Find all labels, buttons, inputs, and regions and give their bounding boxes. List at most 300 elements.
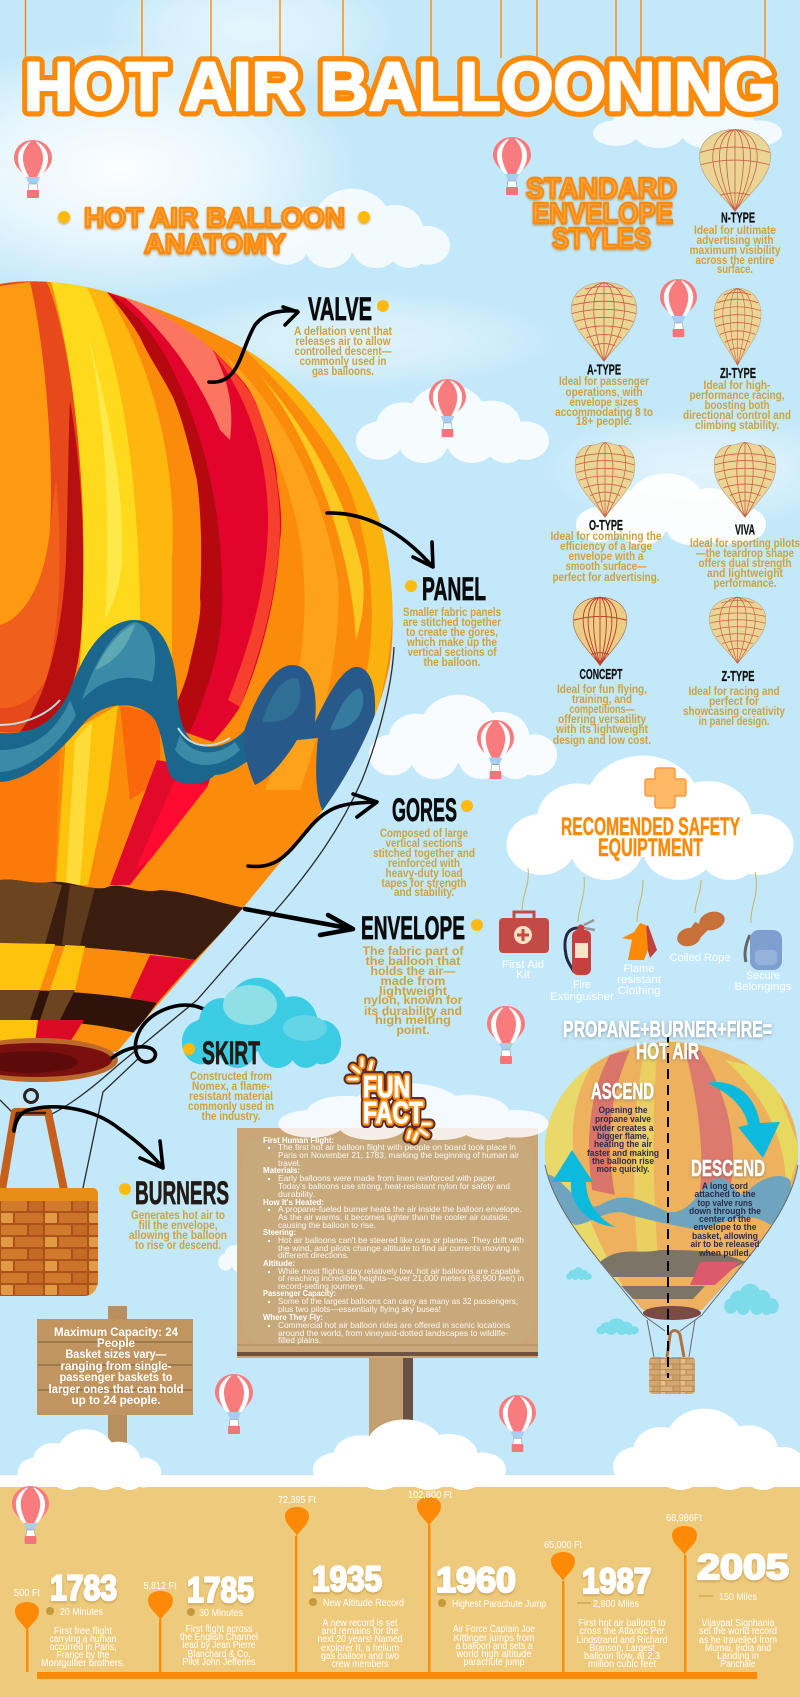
gores heading: GORES bbox=[392, 792, 457, 828]
O-type text: perfect for advertising. bbox=[552, 571, 660, 584]
fun fact text: How It's Heated: bbox=[263, 1197, 324, 1207]
timeline bar bbox=[37, 1672, 757, 1679]
dark lower bands bbox=[0, 880, 245, 960]
Concept balloon bbox=[573, 597, 627, 665]
N-type text: maximum visibility bbox=[690, 244, 781, 257]
milestone 1987 bbox=[576, 1562, 668, 1670]
pin 1987 bbox=[544, 1540, 582, 1672]
fun fact text: First Human Flight: bbox=[263, 1135, 334, 1145]
ascend text: more quickly. bbox=[596, 1164, 650, 1174]
balloon envelope bbox=[0, 270, 400, 1060]
A-type text bbox=[555, 375, 653, 428]
heading: anatomy: ANATOMY bbox=[144, 228, 286, 259]
gores text bbox=[373, 827, 475, 899]
equipment labels: Clothing bbox=[618, 985, 660, 997]
fun fact text: Steering: bbox=[263, 1227, 296, 1237]
milestone 1987: 2,900 Miles bbox=[593, 1599, 639, 1610]
A-type balloon bbox=[571, 282, 637, 361]
equipment labels: Flame bbox=[624, 963, 654, 975]
pin 1960: 102,800 Ft bbox=[408, 1490, 452, 1501]
icon: fire extinguisher bbox=[565, 920, 595, 975]
skirt dot bbox=[183, 1043, 195, 1055]
fun fact text: different directions. bbox=[278, 1250, 349, 1260]
style: N-type bbox=[690, 130, 781, 276]
Concept text: design and low cost. bbox=[553, 734, 651, 747]
fun fact text: Early balloons were made from linen reinforced with paper. bbox=[278, 1173, 497, 1183]
sign post bbox=[369, 1358, 413, 1440]
gores text: tapes for strength bbox=[382, 877, 466, 890]
burners text: Generates hot air to bbox=[131, 1209, 225, 1222]
milestone 1960: parachute jump bbox=[464, 1657, 525, 1668]
panel heading: PANEL bbox=[422, 571, 486, 607]
pin 1960 bbox=[408, 1490, 452, 1672]
equipment labels: Belongings bbox=[734, 981, 792, 993]
blue wave right bbox=[243, 665, 375, 812]
equipment labels: resistant bbox=[617, 974, 661, 986]
fun fact text: A propane-fueled burner heats the air inside the balloon envelope. bbox=[278, 1204, 522, 1214]
icon: first aid kit bbox=[499, 912, 549, 953]
Z-type text: Ideal for racing and bbox=[688, 685, 780, 698]
fun fact logo: FACT bbox=[363, 1095, 423, 1130]
valve text: commonly used in bbox=[300, 355, 386, 368]
equipment labels bbox=[502, 952, 792, 1003]
milestone 1935: next 20 years! Named bbox=[318, 1634, 403, 1645]
title: HOT AIR BALLOONING bbox=[24, 48, 776, 125]
fun fact logo: FACT bbox=[363, 1095, 423, 1130]
capacity sign bbox=[37, 1306, 193, 1447]
envelope text: The fabric part of bbox=[362, 945, 464, 958]
ascend text: heating the air bbox=[594, 1139, 652, 1149]
capacity text bbox=[48, 1327, 184, 1407]
milestone 2005 bbox=[697, 1548, 789, 1670]
equipment labels: Kit bbox=[516, 969, 530, 981]
capacity text: ranging from single- bbox=[60, 1361, 172, 1373]
descend text: down through the bbox=[689, 1206, 761, 1216]
milestone 1785: Pilot John Jefferies bbox=[182, 1657, 256, 1668]
burners text: allowing the balloon bbox=[129, 1229, 227, 1242]
panel text: vertical sections of bbox=[408, 646, 497, 659]
fun fact sign bbox=[237, 1059, 549, 1440]
fun fact logo: FACT bbox=[363, 1095, 423, 1130]
fun fact text: While most flights stay relatively low, hot air balloons are capable bbox=[278, 1266, 520, 1276]
milestone 1783 bbox=[41, 1569, 125, 1669]
fun fact text: around the world, from vineyard-dotted landscapes to wildlife- bbox=[278, 1328, 508, 1338]
capacity text: Basket sizes vary— bbox=[66, 1349, 167, 1361]
pale balloon illustration bbox=[540, 1040, 800, 1394]
fun fact text: Passenger Capacity: bbox=[263, 1288, 336, 1298]
milestone 1960 bbox=[436, 1561, 546, 1668]
fun fact text bbox=[263, 1135, 524, 1345]
fun fact text: Altitude: bbox=[263, 1258, 295, 1268]
fun fact text: record-setting journeys. bbox=[278, 1281, 365, 1291]
Concept text: training, and bbox=[572, 693, 632, 706]
title: HOT AIR BALLOONING bbox=[24, 48, 776, 125]
Concept name: CONCEPT bbox=[580, 667, 623, 683]
capacity text: up to 24 people. bbox=[72, 1395, 160, 1407]
heading: ascend: ASCEND bbox=[591, 1078, 654, 1104]
descend text: basket, allowing bbox=[692, 1231, 758, 1241]
safety cloud bbox=[506, 756, 794, 880]
fun fact text: Hot air balloons can't be steered like cars or planes. They drift with bbox=[278, 1235, 524, 1245]
N-type text: Ideal for ultimate bbox=[694, 224, 776, 237]
milestone 1785: Blanchard & Co, bbox=[188, 1649, 250, 1660]
milestone 2005: set the world record bbox=[699, 1626, 777, 1637]
basket bbox=[0, 1188, 98, 1296]
O-type text: smooth surface— bbox=[566, 560, 647, 573]
envelope text: point. bbox=[396, 1024, 430, 1037]
callout arrows bbox=[14, 307, 433, 1168]
valve heading: VALVE bbox=[308, 291, 372, 327]
gores text: reinforced with bbox=[388, 857, 460, 870]
ascend text: Opening the bbox=[598, 1105, 648, 1115]
Viva text: performance. bbox=[714, 577, 776, 590]
hanging strings bbox=[26, 0, 765, 58]
large balloon illustration bbox=[0, 270, 400, 1296]
A-type text: accommodating 8 to bbox=[555, 406, 653, 419]
panel dot bbox=[405, 580, 417, 592]
panel text: Smaller fabric panels bbox=[403, 606, 501, 619]
heading: standard envelope styles: STYLES bbox=[552, 223, 651, 255]
fun fact text: filled plains. bbox=[278, 1335, 321, 1345]
milestone 1783: 1783 bbox=[50, 1569, 117, 1608]
milestone 1783: occurred in Paris, bbox=[50, 1642, 116, 1653]
label: valve bbox=[294, 291, 392, 378]
Z-type text bbox=[683, 685, 785, 728]
valve text: releases air to allow bbox=[296, 335, 391, 348]
A-type text: envelope sizes bbox=[570, 396, 638, 409]
milestone 1785: the English Channel bbox=[180, 1632, 258, 1643]
envelope heading: ENVELOPE bbox=[361, 910, 465, 946]
envelope text: made from bbox=[380, 975, 446, 988]
lower fan stripes bbox=[0, 745, 60, 885]
dashed cord bbox=[667, 1037, 669, 1378]
milestone 1935: gas balloon and two bbox=[321, 1651, 399, 1662]
milestone 1785: First flight across bbox=[186, 1624, 252, 1635]
valve text bbox=[294, 325, 392, 378]
icon: backpack bbox=[745, 930, 782, 970]
milestone 1960: world high altitude bbox=[456, 1649, 532, 1660]
thin cable lines bbox=[0, 647, 394, 1188]
background clouds bbox=[218, 96, 782, 1272]
fun fact text: the wind, and pilots change altitude to find air currents moving in bbox=[278, 1243, 519, 1253]
milestone 1960: Air Force Captain Joe bbox=[453, 1624, 535, 1635]
ZI-type text: performance racing, bbox=[690, 389, 784, 402]
icon: gloves bbox=[622, 923, 657, 960]
panel: how it works balloon bbox=[540, 1016, 800, 1394]
N-type text: across the entire bbox=[696, 254, 775, 267]
small blue clouds bbox=[566, 1267, 779, 1335]
style: O-type bbox=[550, 442, 662, 584]
capacity text: larger ones that can hold bbox=[48, 1384, 184, 1396]
skirt text: resistant material bbox=[189, 1090, 273, 1103]
equipment labels: Extinguisher bbox=[550, 991, 614, 1003]
descend text: attached to the bbox=[694, 1189, 756, 1199]
sign board bbox=[37, 1319, 193, 1415]
O-type balloon bbox=[575, 442, 635, 517]
valve text: A deflation vent that bbox=[294, 325, 392, 338]
panel text: to create the gores, bbox=[406, 626, 498, 639]
milestone 1935: crew members bbox=[332, 1659, 388, 1670]
fun fact logo: FUN bbox=[363, 1069, 410, 1104]
panel text: which make up the bbox=[406, 636, 497, 649]
pin 1785: 5,812 Ft bbox=[144, 1581, 177, 1592]
milestone 2005: 150 Miles bbox=[719, 1592, 757, 1603]
skirt heading: SKIRT bbox=[202, 1035, 260, 1071]
pin 2005 bbox=[666, 1513, 702, 1672]
equipment labels: First Aid bbox=[502, 959, 544, 971]
ascend text: faster and making bbox=[587, 1148, 659, 1158]
milestone 2005: Panchale bbox=[720, 1659, 756, 1670]
descend text: air to be released bbox=[690, 1239, 760, 1249]
ring bbox=[24, 1090, 38, 1102]
O-type text: envelope with a bbox=[568, 550, 644, 563]
valve dot bbox=[377, 300, 389, 312]
N-type text: advertising with bbox=[696, 234, 774, 247]
ascend text: wider creates a bbox=[592, 1123, 654, 1133]
arrow: ascend bbox=[552, 1150, 615, 1227]
Viva text bbox=[690, 537, 800, 590]
milestone 1783: First free flight bbox=[54, 1626, 112, 1637]
ZI-type text: boosting both bbox=[704, 399, 770, 412]
ascend text: the balloon rise bbox=[592, 1156, 654, 1166]
milestone 1783: France by the bbox=[56, 1650, 110, 1661]
hanging cords bbox=[522, 868, 756, 923]
label: panel bbox=[403, 571, 501, 669]
equipment labels: Fire bbox=[573, 979, 591, 991]
ZI-type balloon bbox=[714, 288, 761, 365]
fun fact logo: FUN bbox=[363, 1069, 410, 1104]
pin 1783: 500 Ft bbox=[14, 1588, 40, 1599]
N-type text bbox=[690, 224, 781, 276]
equipment labels: Secure bbox=[746, 970, 780, 982]
fun fact text: of reaching incredible heights—over 21,000 meters (68,900 feet) in bbox=[278, 1273, 524, 1283]
pin 1935: 72,395 Ft bbox=[278, 1495, 316, 1506]
fun fact text: Today's balloons use strong, heat-resistant nylon for safety and bbox=[278, 1181, 510, 1191]
fun fact text: Some of the largest balloons can carry as many as 32 passengers, bbox=[278, 1296, 518, 1306]
descend text bbox=[689, 1181, 761, 1258]
pin 1935 bbox=[278, 1495, 316, 1672]
milestone 1987: First hot air balloon to bbox=[578, 1618, 666, 1629]
icon: coiled rope bbox=[675, 909, 727, 949]
ZI-type name: ZI-TYPE bbox=[720, 366, 756, 382]
label: gores bbox=[373, 792, 475, 899]
panel text: the balloon. bbox=[424, 656, 480, 669]
burners text bbox=[129, 1209, 227, 1252]
Concept text: with its lightweight bbox=[555, 723, 648, 736]
timeline balloon bbox=[12, 1486, 49, 1544]
envelope dot bbox=[471, 919, 483, 931]
burners text: to rise or descend. bbox=[135, 1239, 221, 1252]
milestone 1935: A new record is set bbox=[322, 1618, 398, 1629]
ascend text: propane valve bbox=[595, 1114, 651, 1124]
milestone 1987: 1987 bbox=[582, 1562, 651, 1601]
fun fact text: plus two pilots—essentially flying sky buses! bbox=[278, 1304, 441, 1314]
burners text: fill the envelope, bbox=[138, 1219, 218, 1232]
basket handle bbox=[2, 1112, 64, 1190]
milestone 1987: cross the Atlantic Per bbox=[580, 1626, 665, 1637]
milestone 1960: a balloon and sets a bbox=[456, 1641, 533, 1652]
white band and clouds bbox=[0, 1409, 800, 1490]
heading: anatomy: HOT AIR BALLOON bbox=[84, 202, 345, 233]
fun fact text: As the air warms, it becomes lighter than the cooler air outside, bbox=[278, 1212, 510, 1222]
milestone 1935: 1935 bbox=[312, 1560, 382, 1599]
milestone 1935: New Altitude Record bbox=[323, 1598, 404, 1609]
safety heading bbox=[561, 813, 740, 862]
envelope text: its durability and bbox=[364, 1005, 462, 1018]
milestone 2005: Vijaypat Signhania bbox=[702, 1618, 775, 1629]
label: envelope bbox=[361, 910, 483, 1037]
milestone 1987: Branson. Largest bbox=[590, 1643, 655, 1654]
fun fact logo bbox=[349, 1059, 430, 1140]
style: ZI-type bbox=[683, 288, 791, 432]
milestone 1785: 30 Minutes bbox=[199, 1608, 243, 1619]
burners dot bbox=[119, 1183, 131, 1195]
O-type name: O-TYPE bbox=[589, 518, 623, 534]
O-type text: efficiency of a large bbox=[560, 540, 652, 553]
capacity text: People bbox=[97, 1338, 135, 1350]
ZI-type text: Ideal for high- bbox=[704, 379, 771, 392]
gores dot bbox=[461, 800, 473, 812]
panel: safety equipment bbox=[499, 756, 794, 1003]
Z-type balloon bbox=[709, 597, 766, 663]
milestone 1987: million cubic feet bbox=[588, 1659, 656, 1670]
envelope text: the balloon that bbox=[366, 955, 461, 968]
milestone 1783: Montgolfier brothers. bbox=[41, 1658, 125, 1669]
envelope text bbox=[362, 945, 464, 1037]
ascend text: bigger flame, bbox=[597, 1131, 649, 1141]
pin 1785 bbox=[144, 1581, 177, 1672]
fun fact text: durability. bbox=[278, 1189, 315, 1199]
O-type text: Ideal for combining the bbox=[550, 530, 662, 543]
A-type text: operations, with bbox=[566, 386, 642, 399]
decorative mini balloons bbox=[14, 137, 697, 1452]
fun fact text: Materials: bbox=[263, 1165, 300, 1175]
descend text: envelope to the bbox=[694, 1222, 756, 1232]
descend text: when pulled. bbox=[698, 1248, 751, 1258]
safety heading: EQUIPTMENT bbox=[598, 834, 703, 862]
A-type text: Ideal for passenger bbox=[559, 375, 649, 388]
fun fact text: causing the balloon to rise. bbox=[278, 1220, 376, 1230]
milestone 1783: 20 Minutes bbox=[60, 1607, 103, 1618]
Concept text: competitions— bbox=[570, 703, 635, 716]
heading: propane formula: HOT AIR bbox=[636, 1038, 699, 1064]
fun fact text: Paris on November 21, 1783, marking the beginning of human air bbox=[278, 1150, 519, 1160]
sign post bbox=[108, 1306, 127, 1447]
gores text: vertical sections bbox=[386, 837, 462, 850]
heading: standard envelope styles: STANDARD bbox=[526, 173, 677, 205]
style: Z-type bbox=[683, 597, 785, 728]
milestone 1785: lead by Jean Pierre bbox=[182, 1640, 256, 1651]
N-type text: surface. bbox=[717, 263, 753, 276]
descend text: top valve runs bbox=[698, 1198, 752, 1208]
panel: timeline bbox=[0, 1409, 800, 1697]
envelope text: lightweight bbox=[379, 985, 447, 998]
milestone 1960: Kittinger jumps from bbox=[454, 1633, 534, 1644]
Viva balloon bbox=[714, 442, 776, 517]
descend text: A long cord bbox=[702, 1181, 748, 1191]
N-type name: N-TYPE bbox=[721, 210, 755, 226]
envelope text: nylon, known for bbox=[364, 994, 463, 1007]
envelope text: holds the air— bbox=[370, 965, 456, 978]
A-type text: 18+ people. bbox=[576, 415, 632, 428]
cloud over sign bbox=[278, 1083, 549, 1140]
gores text: stitched together and bbox=[373, 847, 475, 860]
capacity text: Maximum Capacity: 24 bbox=[54, 1327, 179, 1339]
valve text: controlled descent— bbox=[294, 345, 392, 358]
arrow: descend bbox=[707, 1082, 780, 1158]
ZI-type text bbox=[683, 379, 791, 432]
milestone 1935: explorer II, a helium bbox=[321, 1643, 399, 1654]
gores text: and stability. bbox=[394, 886, 454, 899]
Z-type name: Z-TYPE bbox=[722, 669, 755, 685]
pin 1987: 65,000 Ft bbox=[544, 1540, 582, 1551]
skirt text: Constructed from bbox=[190, 1070, 272, 1083]
pin 1783 bbox=[14, 1588, 40, 1672]
milestone 1960: 1960 bbox=[436, 1561, 516, 1600]
fun fact text: Commercial hot air balloon rides are offered in scenic locations bbox=[278, 1320, 510, 1330]
Concept text: Ideal for fun flying, bbox=[557, 683, 647, 696]
heading: standard envelope styles: ENVELOPE bbox=[532, 198, 673, 230]
equipment labels: Coiled Rope bbox=[670, 952, 730, 964]
milestone 1987: Lindstrand and Richard bbox=[576, 1635, 668, 1646]
fun fact text: Where They Fly: bbox=[263, 1312, 323, 1322]
milestone 1783: carrying a human bbox=[50, 1634, 117, 1645]
style: Viva bbox=[690, 442, 800, 590]
milestone 2005: as he travelled from bbox=[699, 1635, 777, 1646]
descend text: center of the bbox=[699, 1214, 751, 1224]
milestone 1960: Highest Parachute Jump bbox=[452, 1599, 546, 1610]
blue cloud bbox=[182, 978, 341, 1068]
milestone 1785 bbox=[180, 1571, 258, 1668]
label: burners bbox=[119, 1175, 229, 1252]
Viva name: VIVA bbox=[735, 522, 755, 538]
Concept text bbox=[553, 683, 651, 747]
skirt text bbox=[188, 1070, 274, 1123]
fun fact text: travel. bbox=[278, 1158, 301, 1168]
panel text bbox=[403, 606, 501, 669]
timeline background bbox=[0, 1486, 800, 1697]
Z-type text: showcasing creativity bbox=[683, 705, 785, 718]
skirt text: commonly used in bbox=[188, 1100, 274, 1113]
style: A-type bbox=[555, 282, 653, 428]
heading: propane formula bbox=[563, 1016, 772, 1064]
pin 2005: 68,986Ft bbox=[666, 1513, 702, 1524]
fun fact logo: FUN bbox=[363, 1069, 410, 1104]
skirt text: Nomex, a flame- bbox=[192, 1080, 270, 1093]
Viva text: and lightweight bbox=[707, 567, 783, 580]
Z-type text: in panel design. bbox=[698, 715, 770, 728]
milestone 1785: 1785 bbox=[187, 1571, 254, 1610]
N-type balloon bbox=[699, 130, 771, 211]
Concept text: offering versatility bbox=[558, 713, 646, 726]
A-type name: A-TYPE bbox=[587, 362, 621, 378]
gores text: heavy-duty load bbox=[386, 867, 462, 880]
valve text: gas balloons. bbox=[312, 365, 374, 378]
blue wave left bbox=[0, 620, 260, 784]
milestone 2005: 2005 bbox=[697, 1548, 789, 1587]
milestone 1935: and remains for the bbox=[322, 1626, 399, 1637]
milestone 1987: balloon flow, at 2.3 bbox=[584, 1651, 660, 1662]
ZI-type text: climbing stability. bbox=[695, 419, 779, 432]
burners heading: BURNERS bbox=[135, 1175, 229, 1211]
icon: medical plus bbox=[645, 768, 686, 808]
skirt text: the industry. bbox=[202, 1110, 260, 1123]
gores text: Composed of large bbox=[380, 827, 468, 840]
envelope text: high melting bbox=[375, 1014, 451, 1027]
style: Concept bbox=[553, 597, 651, 747]
O-type text bbox=[550, 530, 662, 584]
milestone 2005: Landing in bbox=[717, 1651, 759, 1662]
